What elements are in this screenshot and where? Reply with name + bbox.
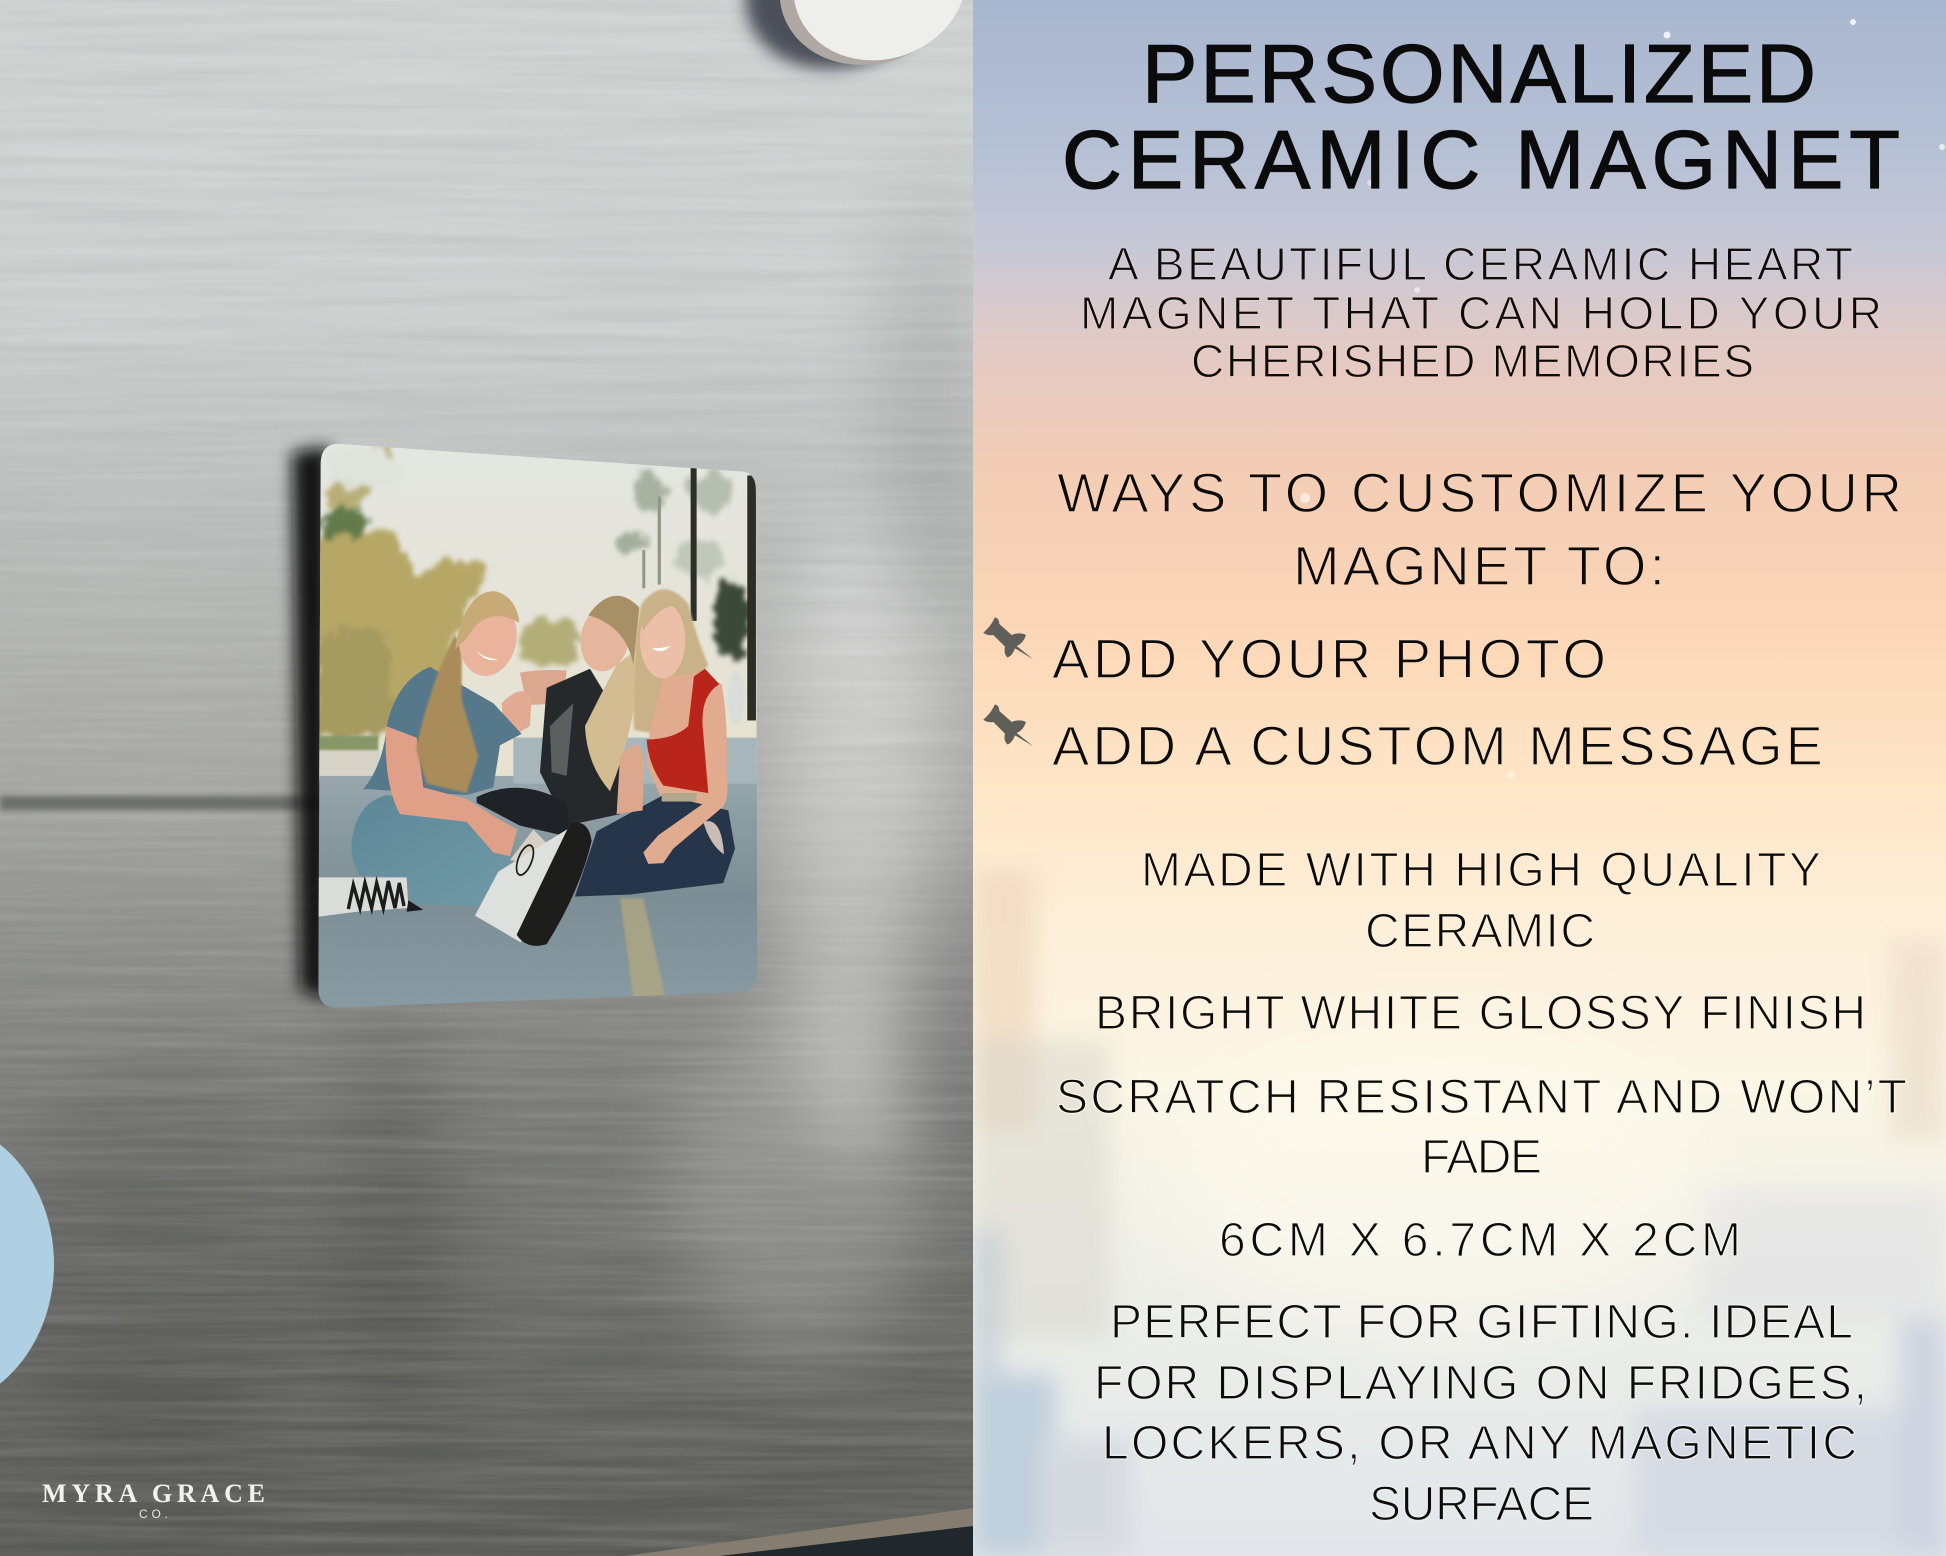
feature: high quality ceramic: MADE WITH HIGH QUALITY	[1141, 844, 1821, 897]
logo: Myra Grace Co.	[42, 1484, 264, 1518]
person middle	[477, 596, 644, 837]
feature: scratch resistant: SCRATCH RESISTANT AND WON’T	[1056, 1071, 1907, 1124]
icon: push pin 2	[983, 704, 1033, 746]
subtitle: CHERISHED MEMORIES	[1191, 335, 1754, 387]
subtitle: MAGNET THAT CAN HOLD YOUR	[1080, 287, 1882, 339]
round blue magnet	[0, 1144, 54, 1384]
title: CERAMIC MAGNET	[1062, 113, 1900, 206]
feature: gifting: PERFECT FOR GIFTING. IDEAL	[1110, 1296, 1853, 1349]
panel: product description	[973, 0, 1946, 1556]
person left	[351, 591, 548, 906]
feature: gifting: FOR DISPLAYING ON FRIDGES,	[1094, 1357, 1867, 1410]
subtitle	[1083, 247, 1879, 377]
feature: dimensions: 6CM X 6.7CM X 2CM	[1219, 1214, 1741, 1267]
feature: glossy finish: BRIGHT WHITE GLOSSY FINISH	[1095, 987, 1866, 1040]
magnet shadow	[292, 446, 330, 1000]
panel: steel fridge photo	[0, 0, 989, 1556]
person right	[575, 589, 735, 896]
photo background trees	[313, 445, 750, 738]
feature: gifting: LOCKERS, OR ANY MAGNETIC	[1102, 1417, 1857, 1470]
feature: scratch resistant: FADE	[1421, 1131, 1542, 1184]
heading: ways to customize: MAGNET TO:	[1293, 534, 1665, 597]
heading: ways to customize	[1058, 474, 1898, 585]
feature: gifting	[1094, 1296, 1867, 1531]
feature: high quality ceramic: CERAMIC	[1365, 905, 1595, 958]
photo boots	[318, 823, 592, 946]
heading: ways to customize: WAYS TO CUSTOMIZE YOUR	[1057, 461, 1902, 524]
customization option: photo: ADD YOUR PHOTO	[1052, 627, 1606, 690]
customization option: message: ADD A CUSTOM MESSAGE	[1052, 714, 1823, 777]
feature: high quality ceramic	[1141, 844, 1821, 958]
ceramic magnet photo	[313, 435, 763, 1013]
subtitle: A BEAUTIFUL CERAMIC HEART	[1108, 238, 1853, 290]
feature: gifting: SURFACE	[1369, 1478, 1594, 1531]
sparkles	[1300, 19, 1945, 779]
fridge bottom edge	[625, 1508, 973, 1556]
title: PERSONALIZED	[1142, 27, 1816, 120]
title	[1066, 44, 1899, 190]
icon: push pin 1	[983, 617, 1033, 659]
logo: Myra Grace Co.: MYRA GRACE	[42, 1479, 265, 1508]
round white magnet	[734, 0, 962, 80]
feature: scratch resistant	[1056, 1071, 1907, 1184]
logo: Myra Grace Co.: CO.	[139, 1507, 168, 1521]
photo road	[313, 751, 380, 782]
